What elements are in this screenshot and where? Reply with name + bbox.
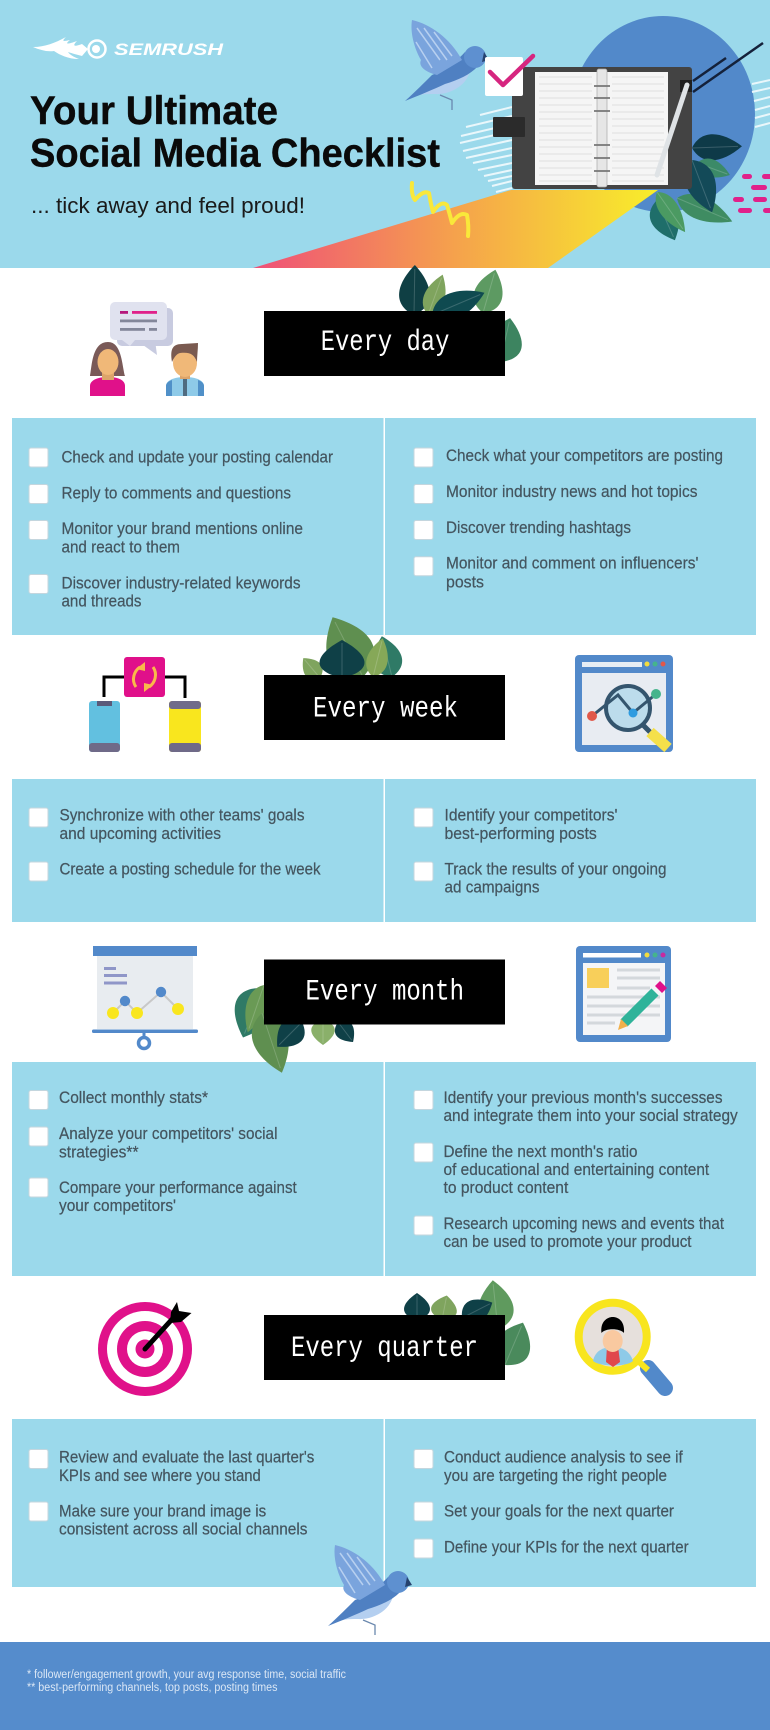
left column items: Check and update your posting calendar [62,448,333,466]
leaves: every day [399,265,527,366]
right column items [414,447,723,591]
leaves: every week [296,607,406,688]
icon: presentation board [92,946,198,1048]
icon: notebook [493,67,692,189]
icon: target with arrow [98,1302,192,1396]
right column items: best-performing posts [444,825,597,843]
footnotes: ** best-performing channels, top posts, posting times [27,1682,278,1694]
leaves: every month [225,981,361,1078]
heading: every week [264,675,505,740]
right column items: Check what your competitors are posting [446,447,723,465]
panel: header banner [0,0,770,268]
right column items: Define your KPIs for the next quarter [444,1539,689,1557]
logo: semrush: SEMRUSH [114,40,224,59]
icon: squiggle [412,183,468,236]
right column items: you are targeting the right people [444,1467,667,1485]
icon: two people talking [90,302,204,396]
left column items: Create a posting schedule for the week [60,861,321,879]
left column items [29,807,321,881]
heading: every month: Every month [306,975,464,1009]
left column items: KPIs and see where you stand [59,1467,261,1485]
icon: white check box [485,56,533,96]
panel: every month checklist [12,1062,756,1276]
right column items: Identify your previous month's successes [444,1089,722,1107]
right column items: Define the next month's ratio [444,1143,638,1161]
white stripes right of circle [752,80,770,127]
icon: notes window with pencil [576,946,671,1042]
right column items [414,1089,738,1251]
left column items: and upcoming activities [60,825,221,843]
leaves behind notebook [644,133,742,246]
white stripes left of notebook [460,107,512,192]
left column items [29,448,333,611]
right column items: Identify your competitors' [444,807,618,825]
right column items: Research upcoming news and events that [444,1215,724,1233]
section: every quarter [12,1278,756,1587]
title: Your Ultimate [30,89,278,133]
right column items: Track the results of your ongoing [444,861,666,879]
footnotes: * follower/engagement growth, your avg response time, social traffic [27,1669,346,1681]
icon: analytics window with magnifier [575,655,673,752]
heading: every day [264,311,505,376]
right column items: can be used to promote your product [444,1233,692,1251]
right column items: posts [446,573,484,591]
left column items: Analyze your competitors' social [59,1125,278,1143]
icon: black pen lines [693,43,763,92]
left column items: Reply to comments and questions [62,484,291,502]
left column items: and react to them [62,538,180,556]
icon: person in magnifier [579,1303,665,1388]
icon: phones syncing [89,657,201,752]
footnotes [27,1669,346,1694]
section: every day [12,265,756,635]
left column items: strategies** [59,1143,139,1161]
left column items: and threads [62,593,142,611]
right column items: Conduct audience analysis to see if [444,1449,683,1467]
left column items: Discover industry-related keywords [62,574,300,592]
left column items: Make sure your brand image is [59,1503,266,1521]
left column items [29,1089,297,1215]
left column items: consistent across all social channels [59,1521,308,1539]
heading: every quarter [264,1315,505,1380]
pink dashes [733,174,770,213]
gradient light ray [253,190,658,268]
left column items: Compare your performance against [59,1179,297,1197]
footer band [0,1642,770,1730]
right column items: and integrate them into your social strategy [444,1107,738,1125]
right column items: Set your goals for the next quarter [444,1503,674,1521]
right column items: Discover trending hashtags [446,519,631,537]
title: Social Media Checklist [30,132,440,176]
left column items: Monitor your brand mentions online [62,520,303,538]
section: every week [12,607,756,922]
panel: every quarter checklist [12,1419,756,1587]
heading: every month [264,960,505,1024]
heading: every quarter: Every quarter [291,1332,478,1366]
left column items: Collect monthly stats* [59,1089,209,1107]
heading: every week: Every week [313,693,458,727]
right column items [414,807,666,897]
panel: every week checklist [12,779,756,922]
right column items: ad campaigns [444,879,540,897]
right column items: to product content [444,1179,569,1197]
icon: bird at bottom [328,1545,412,1635]
logo: semrush [33,37,224,59]
section: every month [12,946,756,1276]
panel: every day checklist [12,418,756,635]
heading: every day: Every day [321,326,449,360]
subtitle: ... tick away and feel proud! [31,193,305,218]
right column items: Monitor and comment on influencers' [446,555,698,573]
right column items: of educational and entertaining content [444,1161,710,1179]
title [30,89,440,176]
icon: bird [405,20,489,110]
left column items: your competitors' [59,1197,176,1215]
left column items: Review and evaluate the last quarter's [59,1449,314,1467]
icon: silver pen [657,85,687,175]
left column items: Synchronize with other teams' goals [60,807,304,825]
left column items [29,1449,314,1539]
right column items: Monitor industry news and hot topics [446,483,698,501]
right column items [414,1449,689,1558]
icon: blue circle [571,16,755,212]
leaves: every quarter [404,1278,539,1372]
